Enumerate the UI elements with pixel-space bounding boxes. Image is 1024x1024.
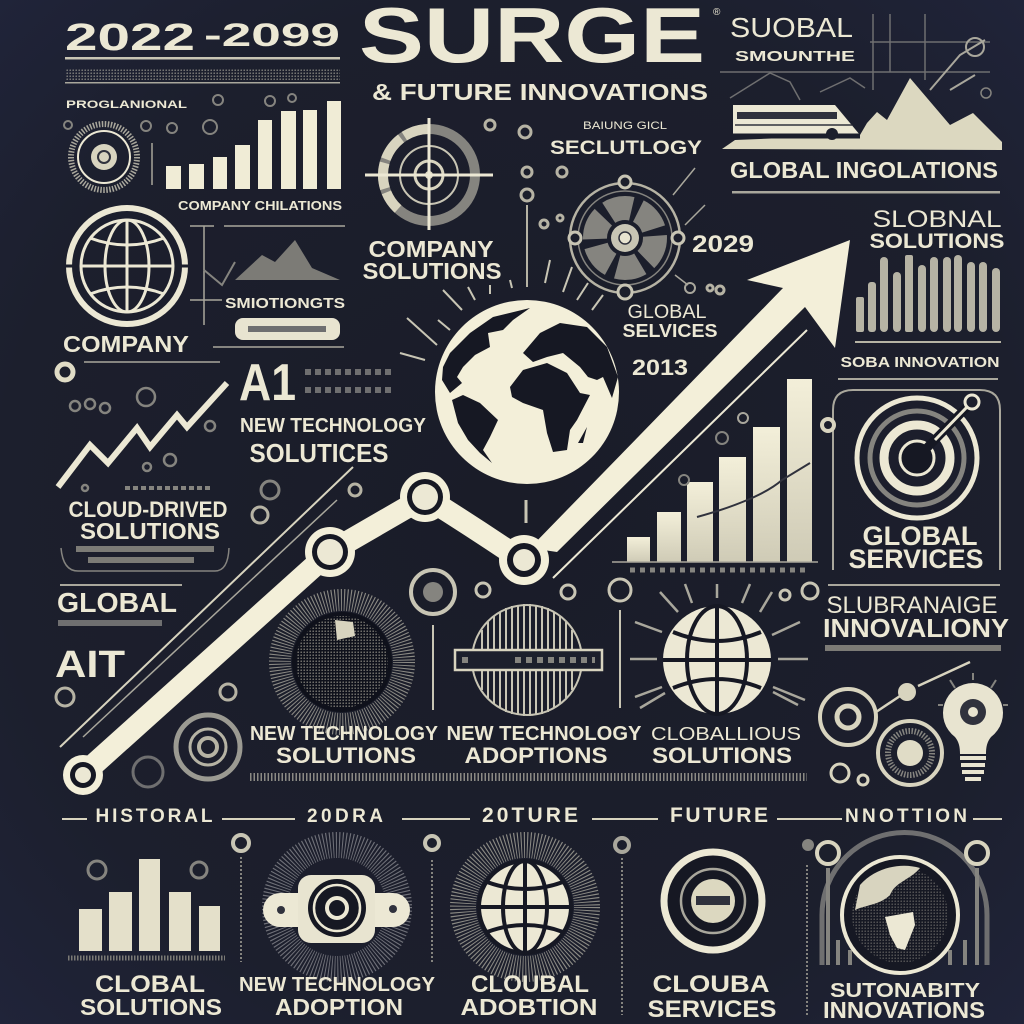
bottom column: cloud globe: CLOUBAL bbox=[471, 971, 589, 998]
registered mark: ® bbox=[713, 7, 721, 18]
timeline labels: 20TURE bbox=[482, 804, 578, 827]
timeline labels bbox=[62, 804, 1002, 827]
header: years: 2022 bbox=[65, 17, 195, 59]
heading: security technology: BAIUNG GICL bbox=[583, 120, 667, 132]
subtitle: & FUTURE INNOVATIONS bbox=[372, 79, 708, 105]
label: global innovations: GLOBAL INGOLATIONS bbox=[730, 157, 998, 183]
panel: small trend graphic: SMIOTIONGTS bbox=[225, 295, 345, 312]
bottom column: sustainability globe: INNOVATIONS bbox=[823, 997, 985, 1023]
label: company solutions: COMPANY bbox=[368, 236, 494, 262]
icon: wire globe left bbox=[65, 208, 189, 324]
header: years bbox=[65, 17, 340, 59]
timeline labels: NNOTTION bbox=[845, 806, 967, 827]
icon: striped globe bbox=[455, 604, 602, 716]
top-right sketch lines bbox=[720, 14, 991, 100]
icon: target badge bbox=[71, 124, 137, 190]
header: rule strips bbox=[65, 57, 340, 84]
small icons: mid row bbox=[411, 570, 818, 710]
bottom column: cloud services badge: CLOUBA bbox=[652, 971, 770, 998]
caption: company solutions: COMPANY CHILATIONS bbox=[178, 198, 342, 213]
label: global innovation: SOBA INNOVATION bbox=[840, 354, 1000, 371]
top-right heading: SMOUNTHE bbox=[735, 48, 855, 65]
column dividers with nodes bbox=[233, 835, 807, 1015]
bottom column: cloud services badge bbox=[648, 852, 776, 1023]
label: sustainable innovation bbox=[823, 584, 1009, 651]
label: A1 new technology solutions: SOLUTICES bbox=[250, 438, 388, 468]
heading: security technology bbox=[550, 120, 702, 159]
labels: three columns: NEW TECHNOLOGY bbox=[250, 723, 439, 745]
bottom column: new technology adoption: NEW TECHNOLOGY bbox=[239, 974, 436, 996]
timeline labels: 20DRA bbox=[307, 806, 383, 827]
main growth arrow bbox=[60, 240, 850, 795]
label: sustainable innovation: INNOVALIONY bbox=[823, 613, 1009, 643]
label: company: COMPANY bbox=[63, 331, 189, 357]
label: company solutions: SOLUTIONS bbox=[362, 258, 502, 284]
bar chart: thin spikes bbox=[855, 255, 1001, 343]
bar chart: company growth bbox=[166, 101, 341, 189]
label: company solutions bbox=[362, 236, 502, 284]
globe rays bbox=[400, 260, 603, 360]
label: A1 new technology solutions bbox=[239, 354, 427, 468]
icon: wire globe with rays bbox=[630, 584, 808, 714]
label: global AI bbox=[55, 584, 182, 686]
label: year 2024: 2029 bbox=[692, 231, 754, 258]
label: cloud-driven solutions: CLOUD-DRIVED bbox=[68, 497, 228, 522]
labels: three columns: SOLUTIONS bbox=[276, 743, 416, 768]
small icon row left bbox=[56, 481, 361, 787]
label: global services: GLOBAL bbox=[628, 302, 706, 323]
panel: global solutions heading: SLOBNAL bbox=[872, 206, 1002, 233]
labels: three columns: ADOPTIONS bbox=[464, 743, 608, 768]
icon: center-top target bbox=[365, 118, 493, 230]
bottom column: bar chart: SOLUTIONS bbox=[80, 994, 222, 1020]
bar chart: center-right growth bbox=[612, 379, 818, 570]
small caption box bbox=[61, 546, 229, 571]
labels: three columns: NEW TECHNOLOGY bbox=[446, 723, 642, 745]
bottom column: sustainability globe: SUTONABITY bbox=[830, 980, 981, 1002]
bottom column: new technology adoption: ADOPTION bbox=[275, 994, 403, 1020]
label: global AI: GLOBAL bbox=[57, 587, 177, 618]
small icons: central column bbox=[485, 120, 724, 294]
label: year 2013: 2013 bbox=[632, 355, 688, 380]
icon: dotted globe bbox=[280, 600, 404, 724]
label: cloud-driven solutions: SOLUTIONS bbox=[80, 518, 220, 544]
bottom column: bar chart: CLOBAL bbox=[95, 971, 205, 998]
label: A1 new technology solutions: NEW TECHNOLOGY bbox=[240, 415, 427, 437]
label: global services bbox=[622, 302, 718, 341]
header: years: -2099 bbox=[204, 17, 340, 53]
divider rule right bbox=[838, 378, 998, 380]
icon: light bulb bbox=[938, 673, 1008, 779]
icon: gear dial bbox=[569, 168, 705, 299]
label: global services right: SERVICES bbox=[848, 544, 984, 574]
label: global AI: AIT bbox=[55, 644, 125, 686]
heading: security technology: SECLUTLOGY bbox=[550, 138, 702, 159]
divider strip top right bbox=[732, 191, 1000, 194]
panel: left trend line bbox=[57, 362, 227, 491]
small caption left: PROGLANIONAL bbox=[66, 99, 187, 111]
bottom column: cloud services badge: SERVICES bbox=[648, 996, 776, 1023]
timeline labels: HISTORAL bbox=[96, 806, 213, 827]
bottom column: cloud globe bbox=[460, 845, 598, 1020]
label: A1 new technology solutions: A1 bbox=[239, 354, 296, 412]
panel: global solutions heading bbox=[870, 206, 1004, 253]
panel: train and mountains bbox=[722, 78, 1002, 150]
icon: central earth globe bbox=[435, 300, 619, 484]
tick strip bbox=[250, 773, 807, 781]
label: global services right bbox=[848, 521, 984, 574]
label: global services right: GLOBAL bbox=[862, 521, 978, 551]
bottom column: sustainability globe bbox=[802, 832, 988, 1023]
top-right heading: SUOBAL bbox=[730, 12, 853, 43]
labels: three columns: SOLUTIONS bbox=[652, 743, 792, 768]
chart doodles bbox=[64, 94, 296, 185]
panel: global solutions heading: SOLUTIONS bbox=[870, 230, 1004, 253]
icons: gears by bulb bbox=[820, 662, 970, 785]
label: global services: SELVICES bbox=[622, 321, 718, 341]
bottom column: cloud globe: ADOBTION bbox=[460, 994, 598, 1020]
bottom column: bar chart bbox=[68, 859, 225, 1020]
bottom column: new technology adoption bbox=[239, 845, 436, 1020]
label: cloud-driven solutions bbox=[68, 497, 228, 544]
panel: small trend graphic bbox=[190, 226, 345, 347]
label: sustainable innovation: SLUBRANAIGE bbox=[826, 592, 998, 619]
labels: three columns bbox=[250, 723, 801, 768]
timeline labels: FUTURE bbox=[670, 804, 768, 827]
labels: three columns: CLOBALLIOUS bbox=[651, 724, 801, 744]
top-right heading bbox=[730, 12, 855, 65]
panel: target with dart bbox=[822, 390, 1000, 570]
